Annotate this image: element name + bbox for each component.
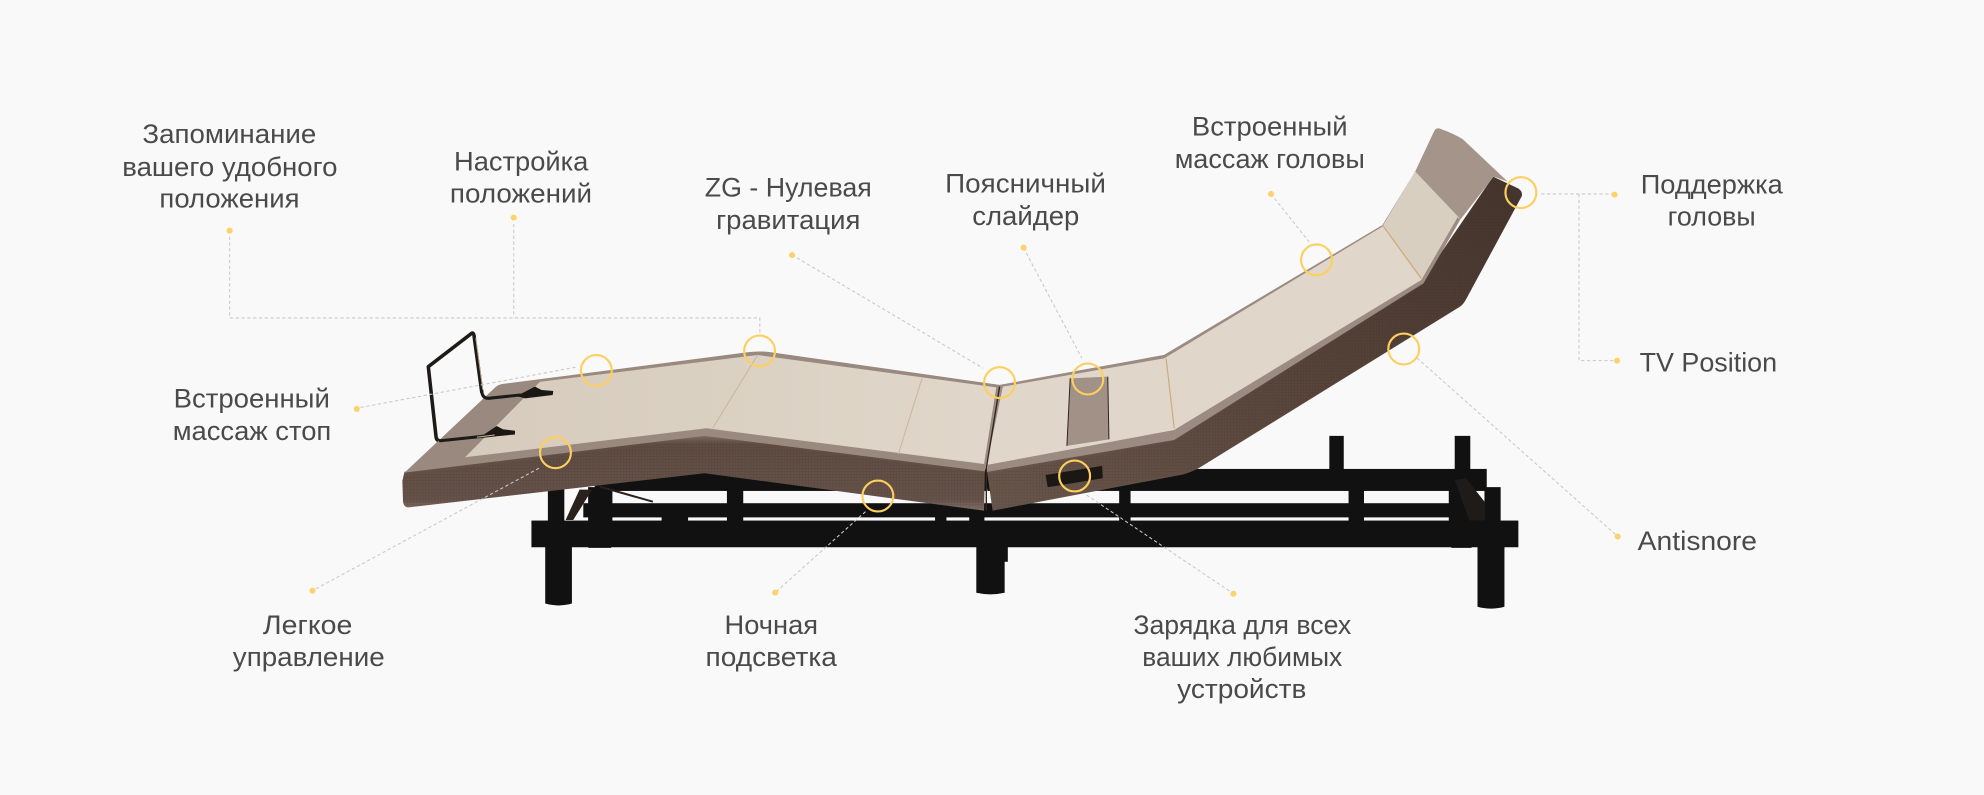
right section side wall xyxy=(987,177,1522,511)
hotspot: antisnore xyxy=(1388,334,1419,364)
footrest retainer bar behind xyxy=(428,333,483,441)
headrest panel xyxy=(1382,172,1458,280)
label: antisnore: Antisnore xyxy=(1638,526,1757,556)
label: TV position: TV Position xyxy=(1640,348,1777,378)
dot: easy control xyxy=(309,588,316,594)
bed base frame xyxy=(531,436,1518,609)
fabric weave left xyxy=(402,438,985,511)
vertical posts xyxy=(548,485,1501,530)
label: easy control: Легкое xyxy=(263,610,352,640)
left beige panels xyxy=(465,355,996,464)
label: charging: ваших любимых xyxy=(1142,642,1342,672)
left seams xyxy=(713,355,922,454)
wire bar upper xyxy=(482,392,520,398)
split seam xyxy=(986,387,1000,511)
label: foot massage xyxy=(173,383,331,446)
retainer clip bottom xyxy=(483,426,515,436)
label: foot massage: Встроенный xyxy=(174,383,330,413)
dot: antisnore xyxy=(1615,533,1621,540)
rail shadow bumps xyxy=(588,547,1472,548)
label: memory: вашего удобного xyxy=(122,152,337,182)
leader: head support and TV xyxy=(1541,194,1613,361)
dot: charging xyxy=(1230,591,1236,597)
label: zero gravity xyxy=(705,173,872,235)
leader: night light xyxy=(775,512,865,593)
hotspot: foot massage xyxy=(581,355,612,386)
lumbar slider slot xyxy=(1067,377,1109,446)
leader: antisnore xyxy=(1417,358,1618,536)
label: head massage: массаж головы xyxy=(1175,144,1365,174)
label: easy control xyxy=(233,610,385,672)
label: head massage: Встроенный xyxy=(1192,112,1348,142)
label: positions: Настройка xyxy=(454,147,589,177)
label: positions: положений xyxy=(450,179,592,209)
right beige panels xyxy=(987,172,1458,465)
dot: lumbar slider xyxy=(1021,245,1027,251)
label: foot massage: массаж стоп xyxy=(173,416,331,446)
hotspot: lumbar slider xyxy=(1072,364,1103,394)
headrest lighter tone xyxy=(1415,128,1508,220)
posts above upper rail xyxy=(1329,436,1470,469)
upper rail xyxy=(595,469,1487,491)
label dots xyxy=(227,191,1621,597)
label: head massage xyxy=(1175,112,1365,174)
label: memory: Запоминание xyxy=(142,119,316,149)
label: easy control: управление xyxy=(233,642,385,672)
label: charging: устройств xyxy=(1177,674,1306,704)
leader: charging xyxy=(1087,495,1233,593)
slot dark edges xyxy=(1067,377,1109,446)
leader: positions xyxy=(513,224,515,318)
left mattress section xyxy=(402,351,1000,511)
leader: memory, positions, zero gravity xyxy=(230,237,760,333)
label: charging: Зарядка для всех xyxy=(1133,610,1351,640)
bed illustration xyxy=(402,128,1522,609)
label: night light xyxy=(706,610,837,672)
right section top border xyxy=(987,172,1460,472)
dot: head support xyxy=(1611,192,1618,198)
label: charging xyxy=(1133,610,1351,704)
dot: night light xyxy=(772,590,778,596)
left section side wall xyxy=(402,431,985,511)
hotspot circles xyxy=(540,177,1536,511)
label: head support: Поддержка xyxy=(1641,169,1783,199)
dot: positions xyxy=(511,215,517,221)
left section top border xyxy=(405,351,1000,473)
legs xyxy=(545,531,1504,609)
fabric weave right xyxy=(987,181,1521,511)
frame diagonal braces xyxy=(566,490,592,520)
leader: foot massage xyxy=(361,367,577,407)
label: lumbar slider xyxy=(945,169,1106,231)
label: zero gravity: гравитация xyxy=(716,205,860,235)
hotspot: head massage xyxy=(1301,244,1332,275)
label: lumbar slider: слайдер xyxy=(972,201,1079,231)
bottom rail xyxy=(531,521,1518,547)
dot: memory xyxy=(227,228,233,234)
dot: TV position xyxy=(1614,358,1620,364)
right mattress section xyxy=(987,128,1522,511)
charging strap xyxy=(1046,466,1103,487)
leader: head massage xyxy=(1271,194,1309,242)
right seams xyxy=(1166,225,1421,428)
hotspot: zero gravity split xyxy=(984,367,1015,398)
label: memory xyxy=(122,119,337,214)
label: head support: головы xyxy=(1668,202,1756,232)
wire bar lower xyxy=(440,435,495,441)
hotspot: charging xyxy=(1059,461,1090,491)
hotspot: zero gravity, positions, memory xyxy=(744,336,775,366)
dot: head massage xyxy=(1268,191,1274,197)
hotspot: night light xyxy=(862,481,893,511)
middle rail xyxy=(583,503,1468,517)
label: memory: положения xyxy=(159,184,299,214)
clip highlight xyxy=(477,435,495,437)
leader: zero gravity xyxy=(792,255,983,368)
label: head support xyxy=(1641,169,1783,232)
hotspot: head support xyxy=(1505,177,1536,208)
label: positions xyxy=(450,147,592,209)
leader: easy control xyxy=(313,468,539,591)
dot: zero gravity xyxy=(789,252,795,258)
label: night light: подсветка xyxy=(706,642,837,672)
hotspot: easy control xyxy=(540,437,571,468)
wire bar xyxy=(428,333,482,441)
label: night light: Ночная xyxy=(725,610,818,640)
label: zero gravity: ZG - Нулевая xyxy=(705,173,872,203)
label: lumbar slider: Поясничный xyxy=(945,169,1106,199)
dot: foot massage xyxy=(354,406,360,412)
retainer clip top xyxy=(517,387,553,398)
feature labels xyxy=(122,112,1783,704)
center split xyxy=(986,387,1000,511)
wire highlight xyxy=(476,338,483,390)
leader: lumbar slider xyxy=(1024,248,1082,358)
footrest retainer front xyxy=(440,387,553,441)
notch gap xyxy=(987,488,990,502)
leader lines xyxy=(230,194,1618,593)
